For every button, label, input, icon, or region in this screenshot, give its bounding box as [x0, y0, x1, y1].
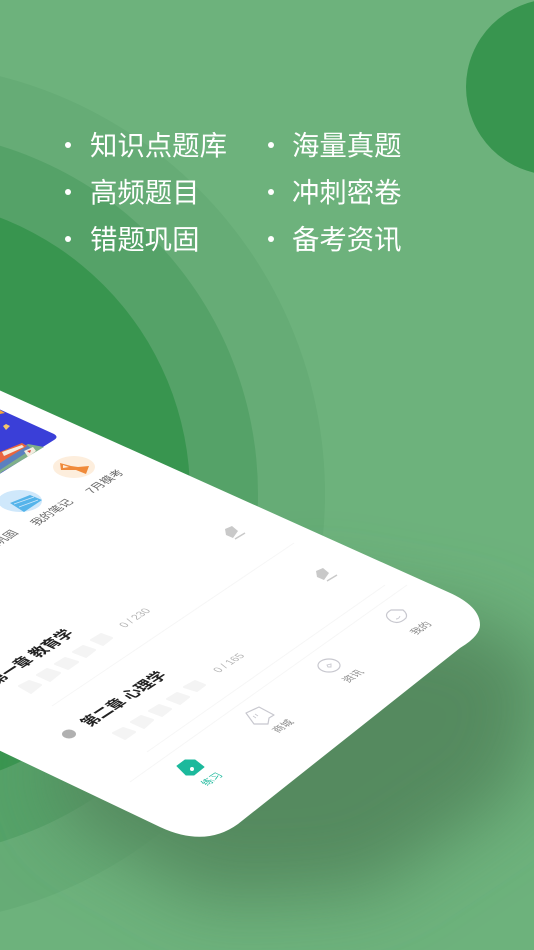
- tab: 练习: [177, 760, 226, 787]
- tab: 商城: [246, 707, 297, 734]
- tab: 资讯: [318, 659, 367, 684]
- bullet item: 冲刺密卷: [292, 177, 402, 208]
- row dividers: [52, 543, 407, 782]
- card shadow: [50, 590, 534, 900]
- banner: [0, 405, 56, 482]
- bullet dot: [62, 730, 76, 738]
- chapter 2 progress: [113, 681, 205, 739]
- label: 我的笔记: 我的笔记: [27, 497, 77, 527]
- tab: 我的: 我的: [407, 620, 435, 636]
- label: 7月模考: 7月模考: [83, 468, 128, 495]
- icon: blue notes: [0, 490, 42, 512]
- phone card: [0, 386, 480, 837]
- bullet item: 知识点题库: [90, 130, 227, 161]
- tab: 我的: [386, 610, 435, 636]
- chapter 2 title: 第二章 心理学: [76, 669, 172, 729]
- chapter 1 progress: [19, 634, 112, 693]
- bullet list: [65, 130, 402, 255]
- bullet item: 错题巩固: [90, 224, 200, 255]
- chapter 1 count: 0 / 230: [116, 607, 154, 629]
- bullet item: 备考资讯: [292, 224, 402, 255]
- tab: 商城: 商城: [269, 718, 297, 734]
- tab: 练习: 练习: [198, 771, 226, 787]
- bullet item: 海量真题: [292, 130, 402, 161]
- chapter 2 count: 0 / 165: [210, 652, 248, 674]
- icon: pencil 1: [225, 526, 245, 539]
- tab: 资讯: 资讯: [339, 668, 367, 684]
- card body: [0, 386, 480, 837]
- concentric circles: [0, 63, 325, 925]
- top-right circle: [466, 0, 534, 175]
- icon: pencil 2: [316, 568, 337, 581]
- bullet item: 高频题目: [90, 177, 200, 208]
- icon: orange bow: [53, 456, 95, 478]
